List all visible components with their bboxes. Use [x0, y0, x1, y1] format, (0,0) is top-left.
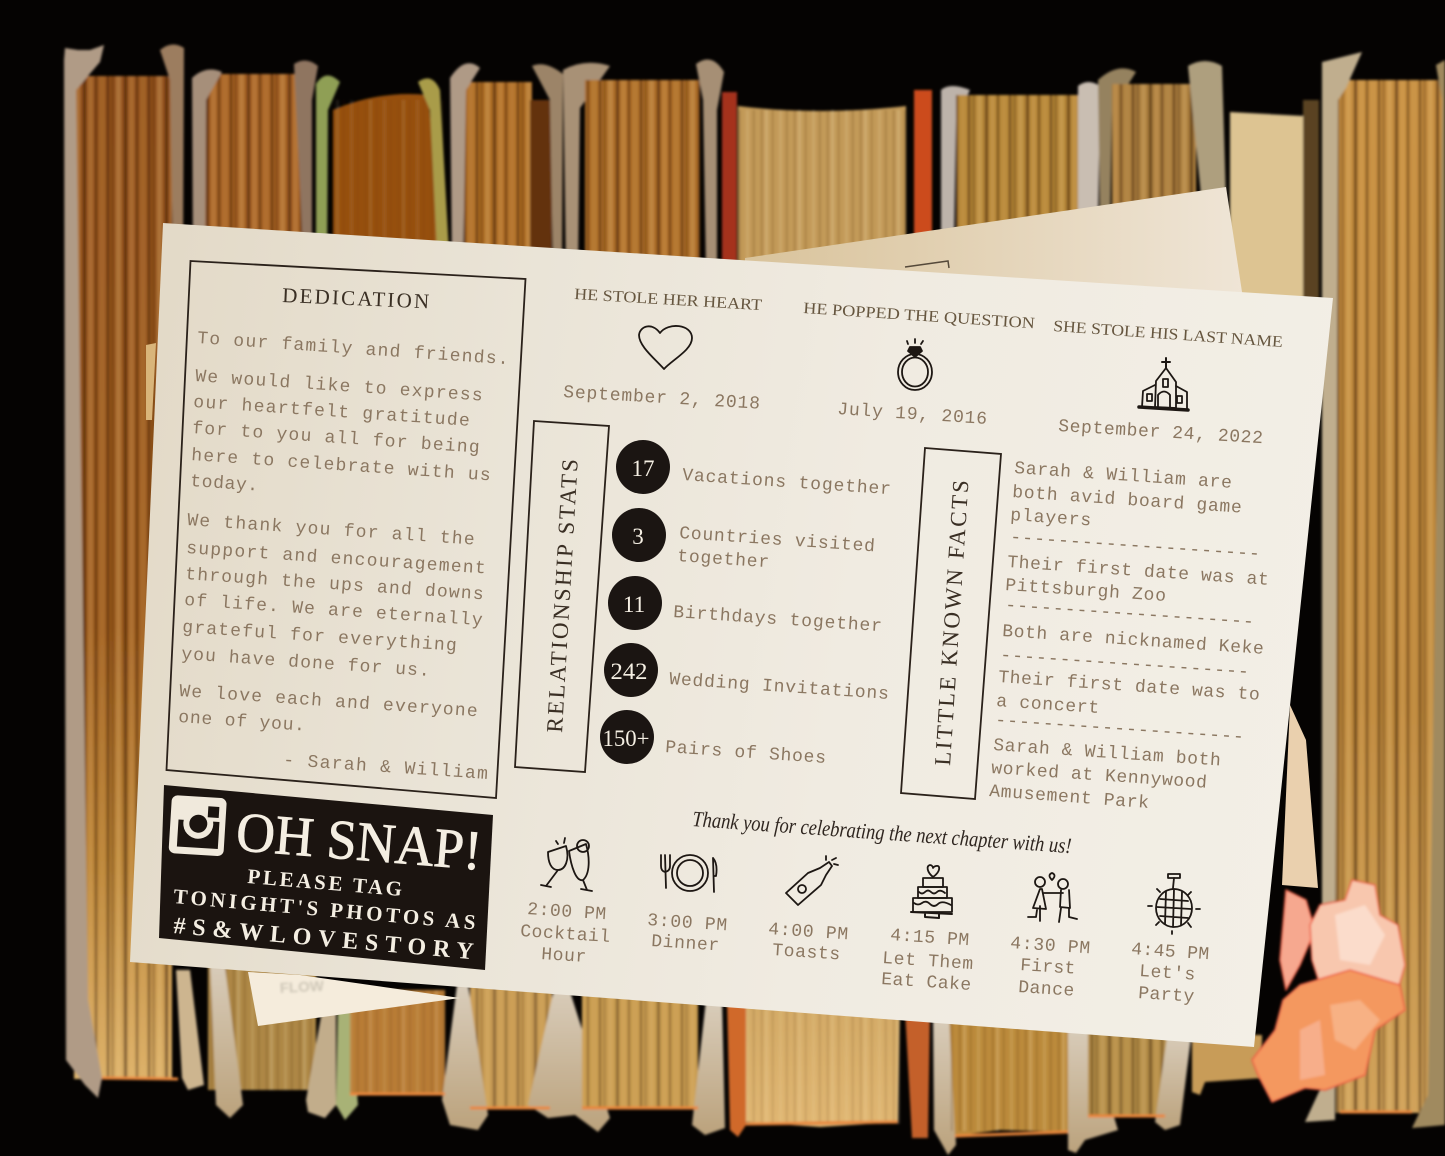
- schedule: cocktail hour: 2:00 PM: [527, 900, 607, 925]
- schedule: cake: Eat Cake: [881, 970, 972, 996]
- schedule: let's party: Let's: [1139, 962, 1196, 986]
- text block: dedication body: support and encouragement: [186, 539, 486, 579]
- text block: dedication body: [178, 329, 509, 785]
- icon: ring with diamond: [898, 339, 932, 390]
- schedule: cocktail hour: Cocktail: [520, 922, 611, 948]
- text block: hashtag instructions: #S&WLOVESTORY: [172, 913, 475, 965]
- book 3 smooth orange: [333, 94, 446, 270]
- icon: champagne bottle: [786, 856, 838, 905]
- text block: dedication body: for to you all for being: [192, 419, 480, 459]
- text block: hashtag instructions: [172, 864, 477, 965]
- cream book: [1230, 112, 1306, 310]
- book 8: [1078, 82, 1100, 225]
- schedule: first dance: Dance: [1018, 978, 1075, 1002]
- text block: little known facts: ---------------------: [1005, 596, 1254, 633]
- schedule: toasts: [768, 856, 849, 965]
- book 2: [204, 74, 304, 270]
- schedule: cocktail hour: Hour: [541, 945, 587, 968]
- schedule: dinner: Dinner: [651, 932, 720, 956]
- schedule: toasts: 4:00 PM: [768, 920, 849, 945]
- stat: birthdays: 11: [623, 592, 645, 617]
- stat: pairs of shoes: [600, 710, 827, 769]
- stat: birthdays: Birthdays together: [673, 603, 882, 637]
- flower: [1252, 880, 1405, 1102]
- text block: dedication body: you have done for us.: [181, 645, 430, 682]
- text block: dedication body: one of you.: [178, 708, 306, 737]
- stat: vacations: 17: [632, 456, 654, 481]
- stat: countries: 3: [632, 524, 644, 549]
- milestone: he stole her heart: [563, 286, 763, 415]
- schedule: let's party: 4:45 PM: [1131, 940, 1210, 965]
- yellow strip: [418, 78, 450, 270]
- stat: wedding invitations: Wedding Invitations: [669, 670, 889, 705]
- lower book edges: [470, 975, 552, 1108]
- stat: pairs of shoes: Pairs of Shoes: [665, 738, 827, 769]
- text block: little known facts: Pittsburgh Zoo: [1005, 576, 1167, 607]
- text block: hashtag instructions: PLEASE TAG: [247, 864, 403, 901]
- book 7: [941, 86, 970, 240]
- text block: little known facts: Both are nicknamed Keke: [1002, 622, 1264, 660]
- schedule: cake: 4:15 PM: [890, 926, 970, 951]
- schedule: cocktail hour: [520, 838, 611, 968]
- book 5: [585, 80, 700, 270]
- text block: little known facts: a concert: [996, 692, 1100, 719]
- panel: relationship stats heading: RELATIONSHIP STATS: [542, 458, 583, 733]
- text block: little known facts: [989, 459, 1269, 814]
- panel: oh snap photo tag: [159, 785, 493, 970]
- icon: instagram camera: [168, 795, 227, 856]
- text block: little known facts: ---------------------: [1000, 646, 1249, 683]
- book 1: [74, 76, 172, 1079]
- schedule: let's party: [1131, 874, 1210, 1008]
- milestone: she stole his last name: [1053, 318, 1283, 449]
- milestone: he popped the question: HE POPPED THE QUESTION: [803, 300, 1036, 332]
- stat: vacations: [616, 440, 891, 500]
- text block: little known facts: worked at Kennywood: [991, 759, 1207, 794]
- milestone: he popped the question: July 19, 2016: [837, 400, 988, 430]
- text block: little known facts: both avid board game: [1012, 483, 1242, 519]
- stat: countries: Countries visited: [679, 524, 875, 557]
- icon: clinking glasses: [541, 838, 592, 891]
- stat: wedding invitations: 242: [610, 659, 648, 684]
- text block: dedication body: through the ups and downs: [185, 565, 484, 605]
- text block: little known facts: Amusement Park: [989, 782, 1150, 814]
- stat list: [600, 440, 891, 769]
- milestone: he stole her heart: September 2, 2018: [563, 383, 760, 415]
- text block: dedication body: today.: [190, 472, 259, 497]
- heading: oh snap: OH SNAP!: [234, 801, 484, 883]
- schedule: first dance: [1010, 873, 1091, 1002]
- text block: little known facts: players: [1010, 506, 1092, 531]
- stat: vacations: Vacations together: [682, 466, 891, 500]
- text block: dedication body: We would like to express: [195, 367, 483, 407]
- panel: relationship stats heading: [515, 421, 609, 772]
- milestone: he stole her heart: HE STOLE HER HEART: [574, 286, 763, 314]
- text block: dedication body: of life. We are eternally: [184, 591, 483, 631]
- icon: heart: [639, 326, 692, 369]
- background card peeking out: [146, 187, 1318, 1026]
- text block: dedication body: grateful for everything: [182, 618, 457, 657]
- book 6: [738, 106, 906, 280]
- stat: countries: [612, 508, 875, 573]
- right book: [1336, 80, 1442, 1113]
- icon: dancing couple: [1028, 873, 1077, 922]
- milestone: she stole his last name: SHE STOLE HIS LAST NAME: [1053, 318, 1283, 351]
- text block: little known facts: Their first date was at: [1007, 553, 1269, 591]
- text block: dedication body: To our family and friends.: [197, 329, 509, 370]
- panel: little known facts heading: LITTLE KNOWN FACTS: [930, 479, 973, 766]
- text block: dedication body: here to celebrate with us: [191, 446, 491, 486]
- stat: pairs of shoes: 150+: [602, 726, 650, 751]
- schedule: dinner: 3:00 PM: [647, 911, 728, 936]
- text block: little known facts: ---------------------: [1010, 528, 1260, 565]
- text block: dedication body: We love each and everyone: [179, 682, 478, 722]
- schedule: first dance: First: [1020, 956, 1076, 980]
- schedule: cake: [881, 865, 974, 996]
- covers: [532, 64, 563, 270]
- schedule: toasts: Toasts: [772, 941, 841, 965]
- schedule: dinner: [647, 855, 728, 956]
- text block: dedication body: - Sarah & William: [283, 751, 488, 785]
- schedule: first dance: 4:30 PM: [1010, 934, 1091, 959]
- stat: birthdays: [608, 576, 882, 637]
- text block: hashtag instructions: TONIGHT'S PHOTOS AS: [173, 884, 477, 934]
- main program card: [130, 223, 1333, 1047]
- stat: wedding invitations: [604, 643, 889, 705]
- milestone: she stole his last name: September 24, 2022: [1058, 417, 1263, 449]
- text block: dedication body: our heartfelt gratitude: [193, 393, 470, 432]
- text block: little known facts: Their first date was to: [998, 668, 1260, 706]
- icon: disco ball: [1148, 874, 1200, 934]
- text block: little known facts: Sarah & William both: [993, 736, 1221, 771]
- text block: little known facts: Sarah & William are: [1014, 459, 1232, 494]
- icon: plate and cutlery: [661, 855, 717, 892]
- book 4: [464, 82, 532, 270]
- panel: little known facts heading: [901, 448, 1001, 799]
- stat: countries: together: [677, 547, 770, 573]
- schedule: cake: Let Them: [882, 949, 974, 975]
- green strip: [316, 75, 340, 270]
- text block: little known facts: ---------------------: [995, 711, 1244, 748]
- panel: dedication: [166, 261, 526, 798]
- heading: dedication: DEDICATION: [282, 283, 430, 313]
- background card peeking out: FLOW: [279, 978, 325, 997]
- milestone: he popped the question: [803, 300, 1036, 430]
- book bottom orange edges: [102, 1078, 1412, 1136]
- icon: church: [1139, 358, 1188, 410]
- script heading: thank you: Thank you for celebrating the next chapter with us!: [692, 806, 1072, 858]
- icon: tiered cake: [911, 865, 952, 918]
- schedule: let's party: Party: [1138, 984, 1195, 1008]
- text block: dedication body: We thank you for all the: [187, 511, 475, 551]
